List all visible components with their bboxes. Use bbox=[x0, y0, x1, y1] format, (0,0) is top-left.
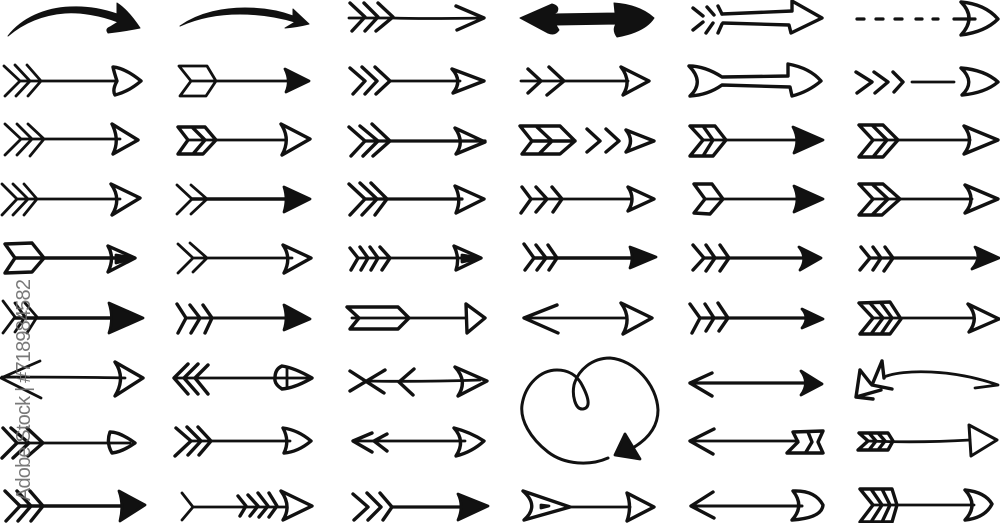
arrow: c2 r8 bbox=[175, 427, 311, 456]
arrow: c6 r6 bbox=[859, 302, 999, 334]
arrow: c4 r5 bbox=[524, 244, 656, 270]
arrow: c4 spiral loop bbox=[522, 358, 658, 463]
arrow: c2 r4 bbox=[177, 185, 310, 214]
arrow: c1 r2 bbox=[4, 65, 141, 96]
arrow: c3 r7 bbox=[350, 367, 487, 396]
arrow: c5 r1 double shaft with ticks bbox=[693, 1, 822, 33]
arrow: thick curved right bbox=[8, 3, 140, 36]
arrow: c4 r2 bbox=[521, 67, 649, 95]
arrow: c5 r8 bbox=[690, 429, 823, 454]
arrow: c3 r5 bbox=[350, 246, 481, 270]
arrow: c6 r8 bbox=[858, 425, 997, 456]
vertical stock watermark text: Adobe Stock | #718984582 bbox=[13, 279, 35, 501]
arrow: c3 r4 bbox=[349, 183, 484, 215]
arrow: c2 r5 bbox=[178, 243, 311, 273]
arrow: c1 r6 bbox=[3, 301, 143, 333]
arrow: c1 r4 bbox=[2, 184, 140, 215]
arrow: c6 r4 bbox=[859, 184, 998, 215]
arrow: c3 r6 bbox=[347, 304, 485, 333]
arrow: c6 r2 chevrons bbox=[856, 68, 998, 95]
arrow: c4 r3 with chevrons bbox=[520, 126, 654, 154]
arrow: c2 r3 bbox=[178, 124, 310, 155]
arrow: c4 r4 bbox=[521, 187, 654, 213]
arrow: c5 r2 double shaft bbox=[689, 64, 821, 96]
arrow: thin curved right bbox=[180, 8, 309, 28]
arrow: c5 r6 bbox=[690, 303, 823, 333]
arrow: c6 r5 bbox=[860, 247, 999, 271]
arrow: c3 r1 bbox=[349, 3, 484, 31]
arrow: c1 r7 bbox=[1, 361, 143, 398]
arrow: c2 r2 bbox=[179, 66, 309, 96]
arrow: c5 r3 bbox=[690, 126, 823, 156]
arrow: c3 r2 bbox=[350, 67, 484, 94]
arrow: c2 r7 bbox=[174, 364, 312, 394]
arrow: c1 r8 bbox=[2, 428, 135, 458]
arrow: c6 r9 bbox=[860, 489, 992, 522]
arrow: c5 r5 bbox=[693, 245, 821, 271]
arrow: c5 r4 bbox=[694, 184, 823, 214]
arrow: c5 r7 bbox=[690, 371, 822, 396]
arrow: c3 r9 bbox=[353, 493, 488, 520]
arrow: c4 r9 bbox=[523, 491, 654, 521]
arrow: c1 r9 bbox=[5, 491, 145, 521]
arrow: c2 r6 bbox=[177, 304, 310, 333]
arrow: c2 r9 bbox=[182, 491, 312, 520]
arrow: c1 r5 bbox=[5, 243, 135, 273]
arrow: c1 r3 bbox=[5, 124, 138, 156]
arrow: c6 r1 dashed bbox=[857, 2, 998, 35]
arrow: c3 r3 bbox=[349, 124, 485, 156]
arrow: c6 r3 bbox=[859, 125, 998, 157]
arrow: c4 r6 bbox=[524, 303, 652, 334]
arrow: c3 r8 bbox=[353, 428, 484, 456]
arrow: c6 r7 curved left bbox=[856, 361, 998, 399]
arrow: c4 r1 double headed bbox=[520, 3, 654, 37]
arrow: c5 r9 bbox=[691, 491, 823, 520]
